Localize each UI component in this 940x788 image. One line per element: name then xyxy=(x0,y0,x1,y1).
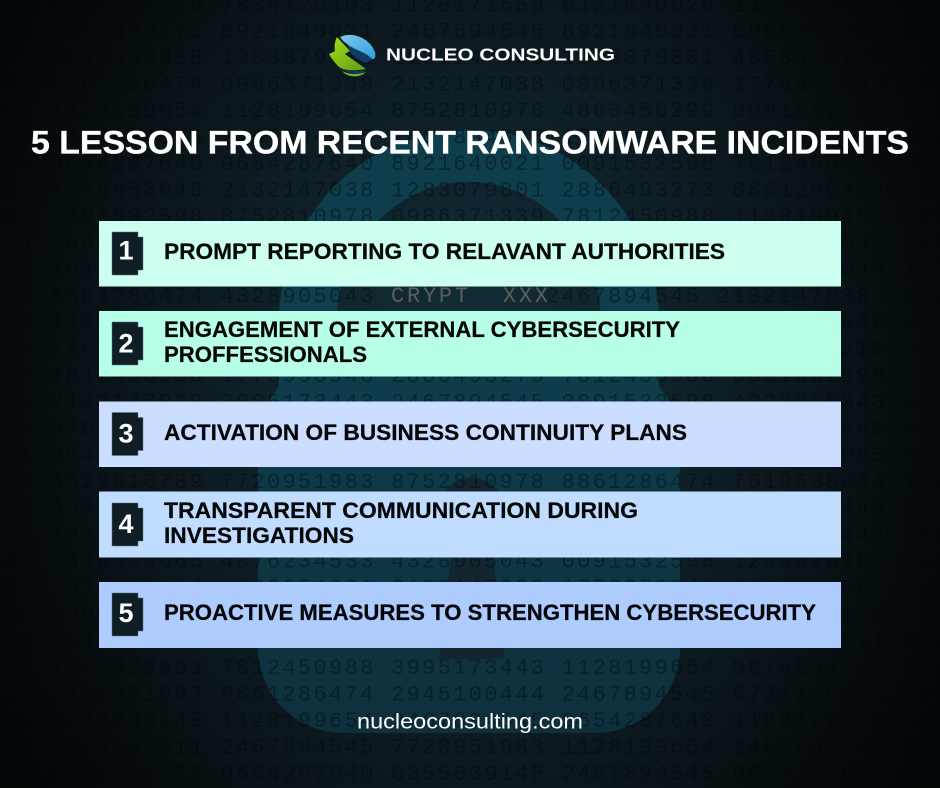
card 2 text xyxy=(164,317,680,367)
icon: globe mark xyxy=(329,35,375,76)
card 2 text: ENGAGEMENT OF EXTERNAL CYBERSECURITY xyxy=(164,317,680,342)
card 3 text: ACTIVATION OF BUSINESS CONTINUITY PLANS xyxy=(164,420,687,445)
badge 3: 3 xyxy=(118,418,134,448)
badge 3 xyxy=(112,412,143,456)
title: 5 LESSON FROM RECENT RANSOMWARE INCIDENTS xyxy=(31,124,909,160)
badge 5: 5 xyxy=(118,598,134,628)
lock label: CRYPT XXX: CRYPT XXX xyxy=(391,284,548,309)
badge 5 xyxy=(112,593,143,636)
card 4 text: INVESTIGATIONS xyxy=(164,523,354,548)
card 4 text: TRANSPARENT COMMUNICATION DURING xyxy=(164,498,638,523)
card 1 text: PROMPT REPORTING TO RELAVANT AUTHORITIES xyxy=(164,239,725,264)
card 2 text: PROFFESSIONALS xyxy=(164,342,367,367)
brand name: NUCLEO CONSULTING xyxy=(386,44,615,64)
card 3 xyxy=(99,402,841,467)
badge 1: 1 xyxy=(118,236,134,266)
website url: nucleoconsulting.com xyxy=(357,710,583,734)
badge 4 xyxy=(112,503,143,546)
badge 2 xyxy=(112,322,143,365)
badge 1 xyxy=(112,232,143,275)
card 2 xyxy=(99,311,841,376)
badge 4: 4 xyxy=(118,509,134,539)
logo xyxy=(329,35,615,76)
card 4 text xyxy=(164,498,638,548)
lock silhouette xyxy=(258,130,680,733)
card 5 xyxy=(99,582,841,648)
card 5 text: PROACTIVE MEASURES TO STRENGTHEN CYBERSECURITY xyxy=(164,600,816,625)
badge 2: 2 xyxy=(118,328,134,358)
card 4 xyxy=(99,492,841,558)
card 1 xyxy=(99,221,841,286)
